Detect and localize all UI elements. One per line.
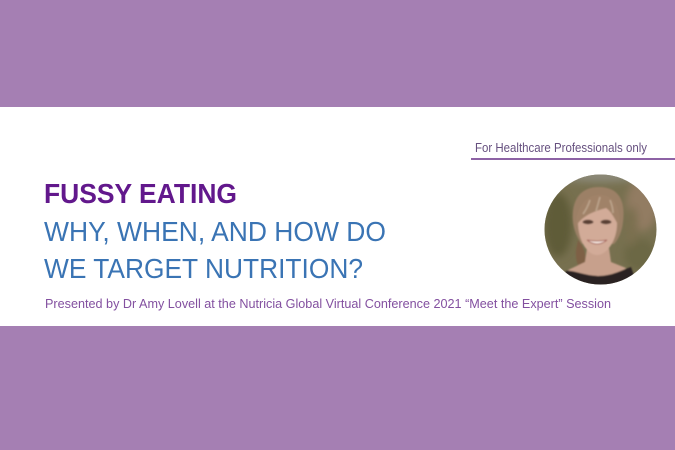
smile bbox=[587, 240, 607, 244]
heading: line three: WE TARGET NUTRITION? bbox=[44, 253, 363, 284]
panel: bottom purple band bbox=[0, 326, 675, 450]
infographic banner bbox=[0, 107, 675, 326]
heading: line two: WHY, WHEN, AND HOW DO bbox=[44, 216, 386, 247]
eyes bbox=[582, 220, 594, 224]
fringe bbox=[578, 206, 618, 223]
face bbox=[578, 206, 617, 255]
panel: white content band bbox=[0, 107, 675, 326]
ponytail bbox=[576, 242, 585, 264]
audience note underline bbox=[471, 158, 675, 160]
presenter credit: Presented by Dr Amy Lovell at the Nutricia Global Virtual Conference 2021 “Meet the Expert” Session bbox=[45, 296, 611, 311]
photo background bbox=[544, 174, 656, 284]
black top bbox=[564, 266, 634, 284]
hair bbox=[573, 187, 624, 244]
panel: top purple band bbox=[0, 0, 675, 107]
audience note: For Healthcare Professionals only bbox=[475, 141, 648, 155]
neck and chest bbox=[568, 248, 626, 280]
fringe shading bbox=[583, 197, 613, 214]
portrait photo of presenter bbox=[544, 174, 656, 284]
heading: fussy eating: FUSSY EATING bbox=[44, 178, 237, 209]
